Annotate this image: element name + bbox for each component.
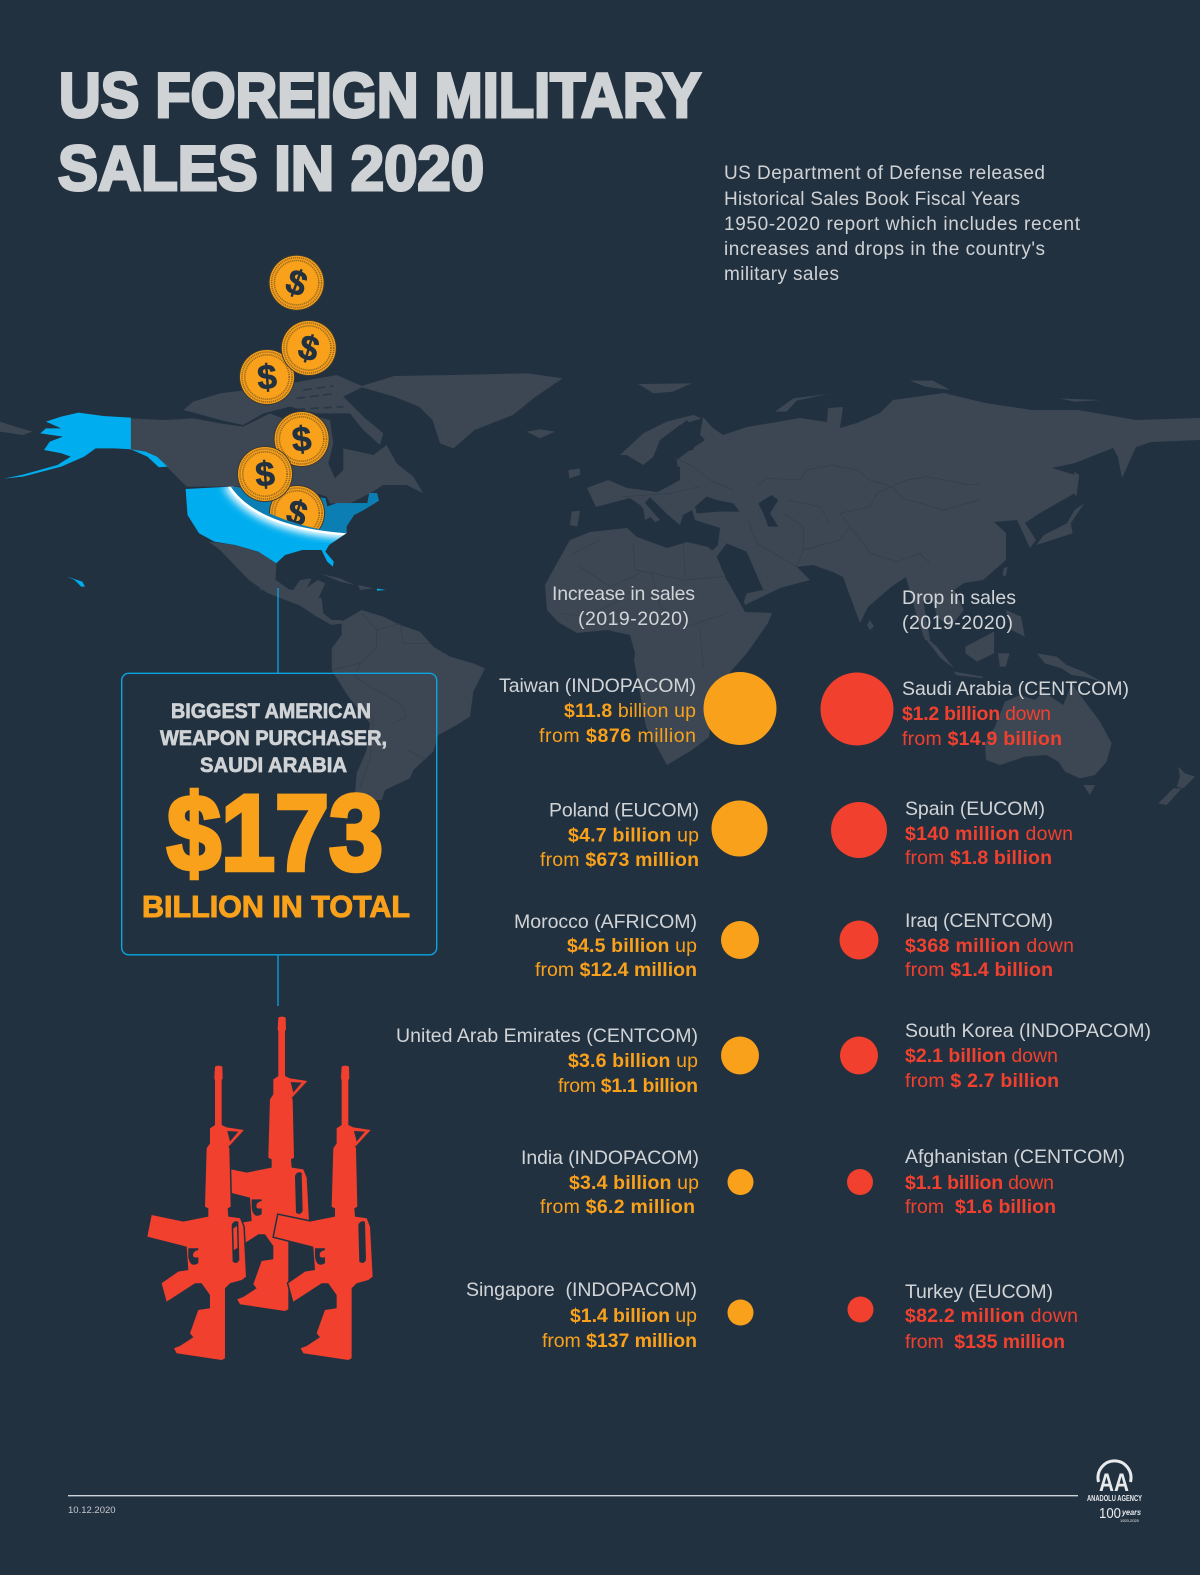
rifle left <box>147 1066 246 1360</box>
increase: Poland: from $673 million <box>540 849 699 871</box>
land: Greenland <box>360 373 563 448</box>
heading: drop in sales: Drop in sales <box>902 587 1016 609</box>
drop: South Korea: South Korea (INDOPACOM) <box>905 1020 1151 1042</box>
increase: Taiwan <box>499 672 776 747</box>
land: Arctic islands <box>183 375 383 445</box>
land: Central America and Caribbean <box>260 574 373 625</box>
increase: India: $3.4 billion up <box>569 1172 699 1194</box>
increase: Poland: $4.7 billion up <box>568 824 699 846</box>
callout heading: WEAPON PURCHASER, <box>160 727 387 750</box>
land: Africa <box>545 528 772 765</box>
drop: Turkey: Turkey (EUCOM) <box>905 1281 1053 1303</box>
logo: Anadolu Agency: ANADOLU AGENCY <box>1087 1494 1142 1503</box>
drop: Turkey: from $135 million <box>905 1331 1065 1353</box>
rifle right outline <box>274 1066 373 1360</box>
logo: Anadolu Agency: 1920-2020 <box>1120 1518 1140 1523</box>
drop: Spain <box>831 798 1073 869</box>
dark seas and countries <box>630 420 778 603</box>
drop: Saudi Arabia: Saudi Arabia (CENTCOM) <box>902 678 1129 700</box>
increase: India: India (INDOPACOM) <box>521 1147 699 1169</box>
coin 1 <box>269 255 325 311</box>
drop: Saudi Arabia: $1.2 billion down <box>902 703 1051 725</box>
land: Eurasia <box>587 393 1200 640</box>
drop: Iraq <box>840 910 1074 981</box>
coin 2: $ <box>294 327 323 370</box>
amount unit: BILLION IN TOTAL <box>142 889 410 924</box>
date: 10.12.2020 <box>68 1505 116 1516</box>
increase: Singapore <box>466 1279 754 1352</box>
amount: $173 <box>167 772 383 893</box>
heading: increase in sales: Increase in sales <box>552 583 695 605</box>
land: Novaya Zemlya <box>775 394 828 412</box>
increase: India <box>521 1147 754 1218</box>
heading: drop in sales <box>902 587 1016 634</box>
callout heading <box>160 700 387 777</box>
rifle back <box>211 1017 309 1311</box>
falling coins <box>237 255 337 541</box>
land: Canada <box>130 413 423 503</box>
logo: Anadolu Agency <box>1087 1461 1142 1523</box>
Arctic channels <box>297 386 343 409</box>
land: Scandinavia, Iceland, Ireland, Portugal <box>527 415 702 527</box>
drop: Turkey <box>848 1281 1078 1353</box>
intro text: military sales <box>724 264 839 285</box>
drop: Saudi Arabia: from $14.9 billion <box>902 728 1062 750</box>
coin 3: $ <box>256 357 278 398</box>
heading: drop in sales: (2019-2020) <box>902 612 1013 634</box>
callout: biggest purchaser <box>122 673 437 955</box>
drop: Afghanistan: $1.1 billion down <box>905 1172 1054 1194</box>
drop: Spain: Spain (EUCOM) <box>905 798 1045 820</box>
drop: Spain: $140 million down <box>905 823 1073 845</box>
increase: UAE <box>396 1025 759 1097</box>
drop: Iraq: Iraq (CENTCOM) <box>905 910 1053 932</box>
drop: Saudi Arabia <box>820 672 1129 750</box>
coin 6: $ <box>282 492 312 535</box>
increase: Morocco: from $12.4 million <box>535 959 697 981</box>
intro text <box>724 163 1081 285</box>
increase: Taiwan: from $876 million <box>539 725 696 747</box>
coin 4 <box>274 411 330 467</box>
land: Chukotka <box>0 422 33 435</box>
world map <box>0 373 1200 805</box>
callout heading: SAUDI ARABIA <box>200 754 347 777</box>
country borders <box>332 457 980 787</box>
coin 5: $ <box>254 454 276 495</box>
increase: Morocco: Morocco (AFRICOM) <box>514 911 697 933</box>
footer rule <box>68 1495 1078 1497</box>
title: SALES IN 2020 <box>58 134 484 204</box>
title <box>58 61 701 204</box>
coin 1: $ <box>281 262 312 305</box>
coin 5 <box>237 446 293 502</box>
increase: Poland: Poland (EUCOM) <box>549 800 699 822</box>
logo: Anadolu Agency: AA <box>1099 1469 1129 1497</box>
intro text: increases and drops in the country's <box>724 239 1045 260</box>
increase: UAE: United Arab Emirates (CENTCOM) <box>396 1025 698 1047</box>
drop: Iraq: from $1.4 billion <box>905 959 1053 981</box>
coin 6 <box>269 485 325 530</box>
increase: Taiwan: $11.8 billion up <box>564 700 696 722</box>
connector line bottom <box>277 955 279 1006</box>
heading: increase in sales <box>552 583 695 630</box>
drop: Iraq: $368 million down <box>905 935 1074 957</box>
rifle right <box>274 1066 373 1360</box>
rifle left outline <box>147 1066 246 1360</box>
logo: Anadolu Agency: 100 <box>1099 1505 1121 1522</box>
logo: Anadolu Agency: years <box>1121 1508 1141 1517</box>
increase: Morocco <box>514 911 759 981</box>
increase: India: from $6.2 million <box>540 1196 695 1218</box>
intro text: US Department of Defense released <box>724 163 1045 184</box>
land: Australia and Oceania <box>985 653 1195 805</box>
drop: Afghanistan: Afghanistan (CENTCOM) <box>905 1146 1125 1168</box>
title: US FOREIGN MILITARY <box>59 61 701 131</box>
increase: Singapore: Singapore (INDOPACOM) <box>466 1279 697 1301</box>
drop: South Korea <box>840 1020 1151 1092</box>
coin 3 <box>239 349 295 405</box>
land: Arctic Russia and Asian islands <box>638 381 1101 678</box>
drop: Spain: from $1.8 billion <box>905 847 1052 869</box>
connector line top <box>277 588 279 673</box>
drop: Afghanistan: from $1.6 billion <box>905 1196 1056 1218</box>
increase: UAE: $3.6 billion up <box>568 1050 698 1072</box>
drop: South Korea: $2.1 billion down <box>905 1045 1058 1067</box>
increase: Morocco: $4.5 billion up <box>567 935 697 957</box>
heading: increase in sales: (2019-2020) <box>578 608 689 630</box>
coin 4: $ <box>291 419 313 460</box>
intro text: Historical Sales Book Fiscal Years <box>724 189 1020 210</box>
icon: rifles <box>147 1017 373 1360</box>
increase: Singapore: from $137 million <box>542 1330 697 1352</box>
drop: South Korea: from $ 2.7 billion <box>905 1070 1059 1092</box>
land: South America <box>332 610 485 800</box>
increase: UAE: from $1.1 billion <box>558 1075 698 1097</box>
coin 2 <box>281 320 337 376</box>
increase: Singapore: $1.4 billion up <box>570 1305 697 1327</box>
increase: Taiwan: Taiwan (INDOPACOM) <box>499 675 696 697</box>
land: Mexico <box>209 542 325 605</box>
drop: Afghanistan <box>847 1146 1125 1218</box>
intro text: 1950-2020 report which includes recent <box>724 214 1081 235</box>
USA highlight <box>4 413 387 591</box>
drop: Turkey: $82.2 million down <box>905 1305 1078 1327</box>
increase: Poland <box>540 800 768 871</box>
callout heading: BIGGEST AMERICAN <box>171 700 371 723</box>
